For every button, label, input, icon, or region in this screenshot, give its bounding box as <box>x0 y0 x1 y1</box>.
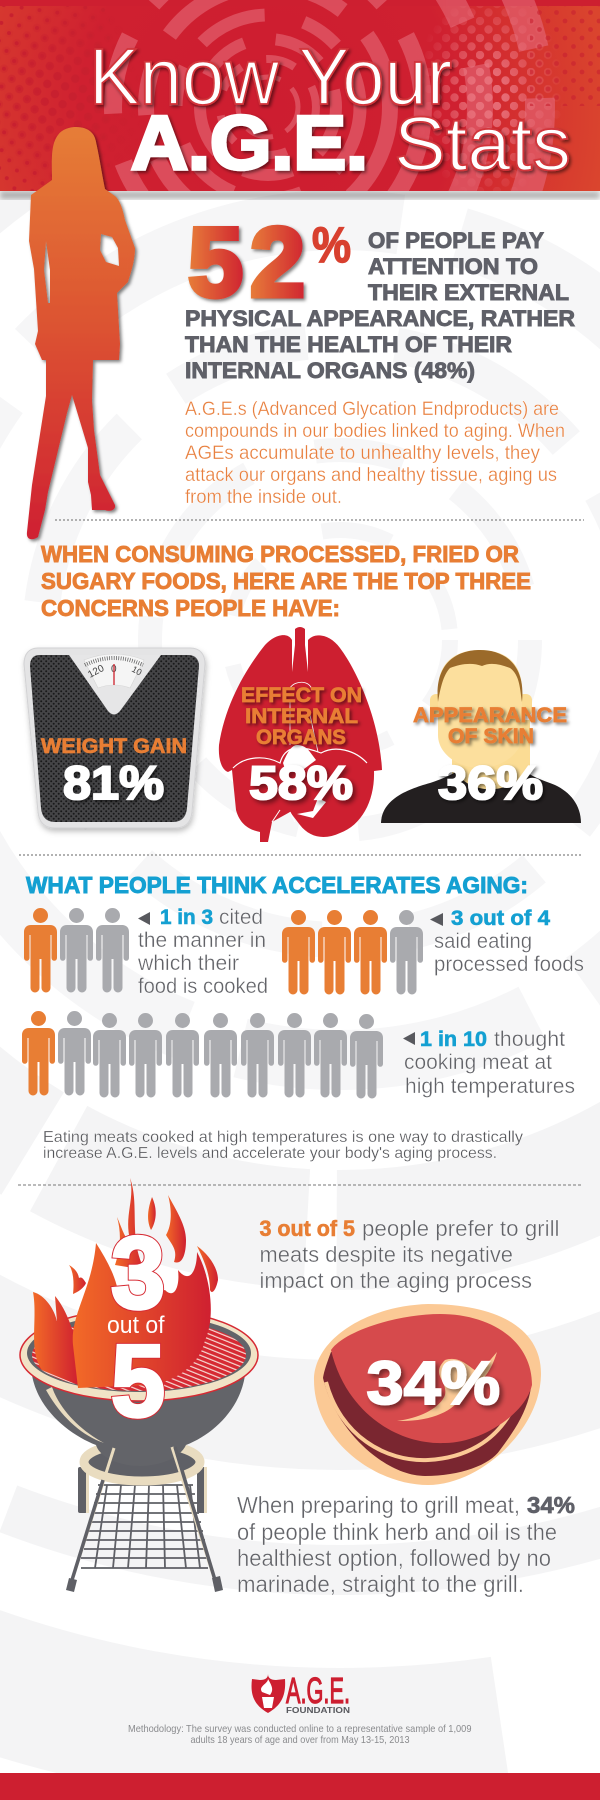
stat text: 1 in 3: which their <box>137 952 239 975</box>
3 out of 5 numerals: 3 <box>111 1216 165 1330</box>
stat: appearance of skin 36% <box>413 704 567 809</box>
pictogram: 1 in 3 <box>24 908 129 992</box>
stat: effect on internal organs 58% <box>241 684 362 809</box>
grill bowl <box>32 1375 245 1466</box>
stat: weight gain 81%: WEIGHT GAIN <box>41 735 187 758</box>
stat text: marinade: of people think herb and oil is the <box>237 1519 557 1545</box>
stat text: 1 in 3: cited <box>219 906 263 929</box>
heading: top three concerns: CONCERNS PEOPLE HAVE: <box>41 595 340 621</box>
icon: bathroom scale: 0 <box>111 664 117 675</box>
stat text: 1 in 10 <box>403 1028 575 1098</box>
stat text: marinade: marinade, straight to the grill. <box>237 1571 524 1597</box>
stat text: 3 out of 4: processed foods <box>434 953 584 976</box>
steak stat 34%: 34% <box>366 1349 500 1417</box>
icon: bathroom scale: 10 <box>130 664 144 677</box>
grill mesh <box>81 1485 208 1568</box>
icon: grill <box>20 1178 258 1592</box>
grill lower ring <box>84 1443 200 1481</box>
explanatory text: increase A.G.E. levels and accelerate your body's aging process. <box>43 1145 497 1162</box>
stat text: 1 in 10: 1 in 10 <box>420 1028 487 1051</box>
stat text: 3 out of 4 <box>430 907 584 976</box>
A.G.E. definition paragraph <box>185 398 565 508</box>
stat text: 3 out of 4: said eating <box>434 930 532 953</box>
title: A.G.E. <box>131 101 368 186</box>
title: Stats <box>394 102 571 187</box>
A.G.E. definition paragraph: from the inside out. <box>185 486 342 508</box>
big 52%: 2 <box>250 207 305 317</box>
stat text: marinade: healthiest option, followed by no <box>237 1545 551 1571</box>
pictogram: 3 out of 4 <box>282 910 423 994</box>
stat text: 1 in 10: high temperatures <box>405 1075 575 1098</box>
pictogram: 1 in 10 <box>22 1011 383 1098</box>
3 out of 5 numerals: out of <box>107 1312 165 1339</box>
methodology note: Methodology: The survey was conducted online to a representative sample of 1,009 <box>128 1723 472 1735</box>
stat: effect on internal organs 58%: ORGANS <box>256 726 346 749</box>
logo: A.G.E. Foundation <box>252 1670 350 1715</box>
heading: top three concerns: WHEN CONSUMING PROCESSED, FRIED OR <box>41 541 519 567</box>
logo: A.G.E. Foundation: A.G.E. <box>286 1670 350 1711</box>
stat text: marinade: 34% <box>527 1492 575 1518</box>
icon: steak <box>314 1304 541 1485</box>
icon: man head <box>381 650 581 823</box>
stat: effect on internal organs 58%: INTERNAL <box>245 705 358 728</box>
stat: appearance of skin 36%: APPEARANCE <box>413 704 567 727</box>
header banner <box>0 0 600 200</box>
3 out of 5 numerals: 3 <box>111 1216 165 1330</box>
statement text: ATTENTION TO <box>368 254 538 279</box>
heading: what accelerates aging: WHAT PEOPLE THINK ACCELERATES AGING: <box>26 872 528 898</box>
grill back legs <box>78 1467 207 1513</box>
title: Know Your <box>89 32 452 121</box>
stat text: 1 in 3: food is cooked <box>138 975 268 998</box>
stat text: 3 out of 5 <box>260 1216 560 1293</box>
big 52% <box>188 207 351 317</box>
stat text: 3 out of 5: impact on the aging process <box>260 1268 532 1293</box>
big 52%: % <box>312 217 351 273</box>
grill front legs <box>66 1447 223 1592</box>
stat text: 1 in 3: the manner in <box>138 929 266 952</box>
flames <box>33 1178 218 1388</box>
statement text: THAN THE HEALTH OF THEIR <box>185 332 512 357</box>
statement text: OF PEOPLE PAY <box>368 228 544 253</box>
statement text: THEIR EXTERNAL <box>368 280 569 305</box>
heading: top three concerns <box>41 541 531 621</box>
woman silhouette <box>27 127 135 539</box>
icon: bathroom scale: 120 <box>86 663 107 681</box>
footer band <box>0 1773 600 1800</box>
explanatory text <box>43 1129 523 1162</box>
3 out of 5 numerals: 5 <box>111 1324 165 1438</box>
stat: weight gain 81% <box>41 735 187 809</box>
A.G.E. definition paragraph: AGEs accumulate to unhealthy levels, they <box>185 442 540 464</box>
stat: effect on internal organs 58%: 58% <box>249 756 353 809</box>
statement text: PHYSICAL APPEARANCE, RATHER <box>185 306 575 331</box>
stat text: 1 in 3: 1 in 3 <box>160 906 213 929</box>
stat: weight gain 81%: 81% <box>63 756 164 809</box>
stat text: 3 out of 5: 3 out of 5 <box>260 1216 355 1241</box>
icon: lungs and organs <box>219 627 382 842</box>
stat text: 1 in 10: cooking meat at <box>404 1051 552 1074</box>
stat text: 1 in 3 <box>137 906 268 998</box>
A.G.E. definition paragraph: attack our organs and healthy tissue, aging us <box>185 464 557 486</box>
stat text: 1 in 10: thought <box>494 1028 565 1051</box>
statement text: INTERNAL ORGANS (48%) <box>185 358 475 383</box>
big 52%: 5 <box>188 207 243 317</box>
icon: bathroom scale <box>24 648 205 828</box>
stat: appearance of skin 36%: 36% <box>438 756 543 809</box>
stat: effect on internal organs 58%: EFFECT ON <box>241 684 362 707</box>
statement text <box>185 228 575 383</box>
stat text: 3 out of 5: meats despite its negative <box>260 1242 513 1267</box>
stat: appearance of skin 36%: OF SKIN <box>448 725 534 748</box>
3 out of 5 numerals <box>107 1216 165 1438</box>
title <box>89 32 571 187</box>
methodology note: adults 18 years of age and over from May 13-15, 2013 <box>190 1734 410 1746</box>
stat text: marinade <box>237 1492 575 1597</box>
grill rim <box>20 1309 258 1401</box>
logo: A.G.E. Foundation: FOUNDATION <box>286 1706 350 1715</box>
explanatory text: Eating meats cooked at high temperatures is one way to drastically <box>43 1129 523 1146</box>
A.G.E. definition paragraph: compounds in our bodies linked to aging. When <box>185 420 565 442</box>
heading: top three concerns: SUGARY FOODS, HERE ARE THE TOP THREE <box>41 568 531 594</box>
stat text: marinade: When preparing to grill meat, <box>237 1492 520 1518</box>
stat text: 3 out of 5: people prefer to grill <box>362 1216 560 1241</box>
methodology note <box>128 1723 472 1746</box>
A.G.E. definition paragraph: A.G.E.s (Advanced Glycation Endproducts) are <box>185 398 559 420</box>
3 out of 5 numerals: 5 <box>111 1324 165 1438</box>
stat text: 3 out of 4: 3 out of 4 <box>451 907 550 930</box>
